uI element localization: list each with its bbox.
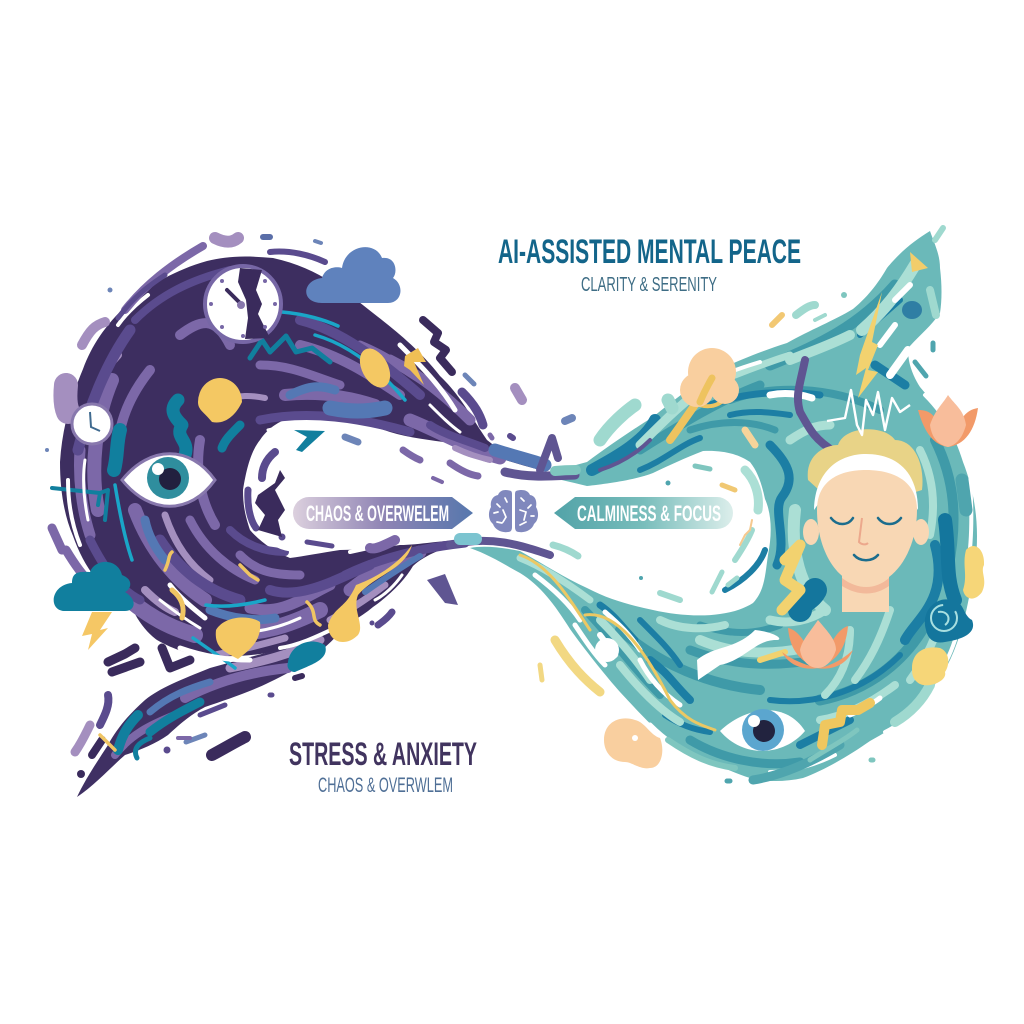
left white gaps	[68, 295, 490, 660]
lilac streaks	[95, 355, 490, 668]
spiral blob	[925, 599, 973, 642]
subtitle: clarity and serenity: CLARITY & SERENITY	[581, 274, 717, 296]
teal cloud	[54, 562, 134, 611]
heading: stress and anxiety: STRESS & ANXIETY	[289, 736, 477, 772]
left arrow pill	[293, 497, 473, 529]
blue cloud	[306, 247, 400, 303]
left arrow pill: CHAOS & OVERWELEM	[306, 501, 449, 526]
right arrow pill: CALMINESS & FOCUS	[577, 501, 721, 526]
pale mint streaks	[520, 265, 940, 722]
teal arrow mark	[294, 430, 325, 452]
bottom lotus	[782, 620, 853, 669]
dark lightning top	[423, 320, 452, 372]
base of left swirl	[60, 257, 540, 656]
yellow wavy band right	[782, 545, 800, 610]
yellow oval	[354, 343, 396, 393]
right arrow pill	[554, 497, 733, 529]
yellow bolt bottom	[822, 703, 870, 745]
purple junction marks	[450, 418, 650, 555]
yellow bolt top	[856, 292, 882, 398]
yellow stroke by peach	[670, 385, 712, 440]
thin yellow ribbons	[520, 555, 590, 630]
heartbeat line	[827, 390, 910, 435]
white gaps right	[535, 270, 971, 772]
peach cloud top	[680, 348, 739, 407]
yellow blob right	[963, 546, 984, 599]
big clock	[205, 266, 281, 342]
purple streaks	[79, 323, 500, 755]
title: AI-assisted mental peace: AI-ASSISTED MENTAL PEACE	[498, 233, 801, 271]
meditating face	[803, 470, 929, 612]
teal blob	[287, 641, 326, 672]
top lotus	[918, 395, 978, 447]
tail of left swirl	[77, 632, 340, 797]
yellow streak over peach cloud	[700, 378, 712, 402]
small yellow strokes	[100, 552, 320, 750]
mid-purple streaks	[78, 270, 485, 600]
right calm swirl	[450, 228, 977, 781]
yellow triangle top	[910, 252, 928, 272]
yellow blob bottom	[216, 617, 260, 659]
left eye	[122, 454, 215, 506]
yellow circle	[198, 378, 242, 423]
white round blob	[595, 638, 619, 662]
mint flecks around right swirl	[553, 228, 966, 781]
yellow blob right lower	[912, 647, 948, 685]
cyan streaks	[115, 312, 405, 668]
dark blue streaks	[592, 300, 939, 745]
peach blob bottom	[604, 718, 662, 768]
icon: brain	[489, 490, 538, 532]
blue streaks	[145, 387, 545, 712]
dark jagged shape near pill	[255, 470, 285, 537]
yellow bolt	[404, 348, 426, 385]
yellow accents right	[520, 252, 928, 745]
subheading: chaos and overwhelm: CHAOS & OVERWLEM	[318, 774, 453, 797]
right eye	[720, 709, 805, 751]
white wave ribbon	[697, 630, 779, 680]
purple flecks around left swirl	[47, 237, 522, 774]
yellow accents left	[82, 343, 426, 750]
hair and headband	[808, 429, 923, 510]
base of right swirl	[470, 231, 977, 781]
purple streak top right	[798, 360, 835, 452]
dark spikes below swirl	[108, 648, 190, 672]
yellow bolt under cloud	[82, 612, 112, 650]
small clock	[72, 404, 112, 444]
mid teal streaks	[585, 285, 954, 764]
dark blue blobs	[800, 301, 955, 610]
yellow blob right	[328, 545, 412, 642]
teal jagged accents	[52, 336, 330, 758]
purple triangle chunk	[427, 574, 458, 605]
left chaos swirl	[47, 237, 545, 797]
